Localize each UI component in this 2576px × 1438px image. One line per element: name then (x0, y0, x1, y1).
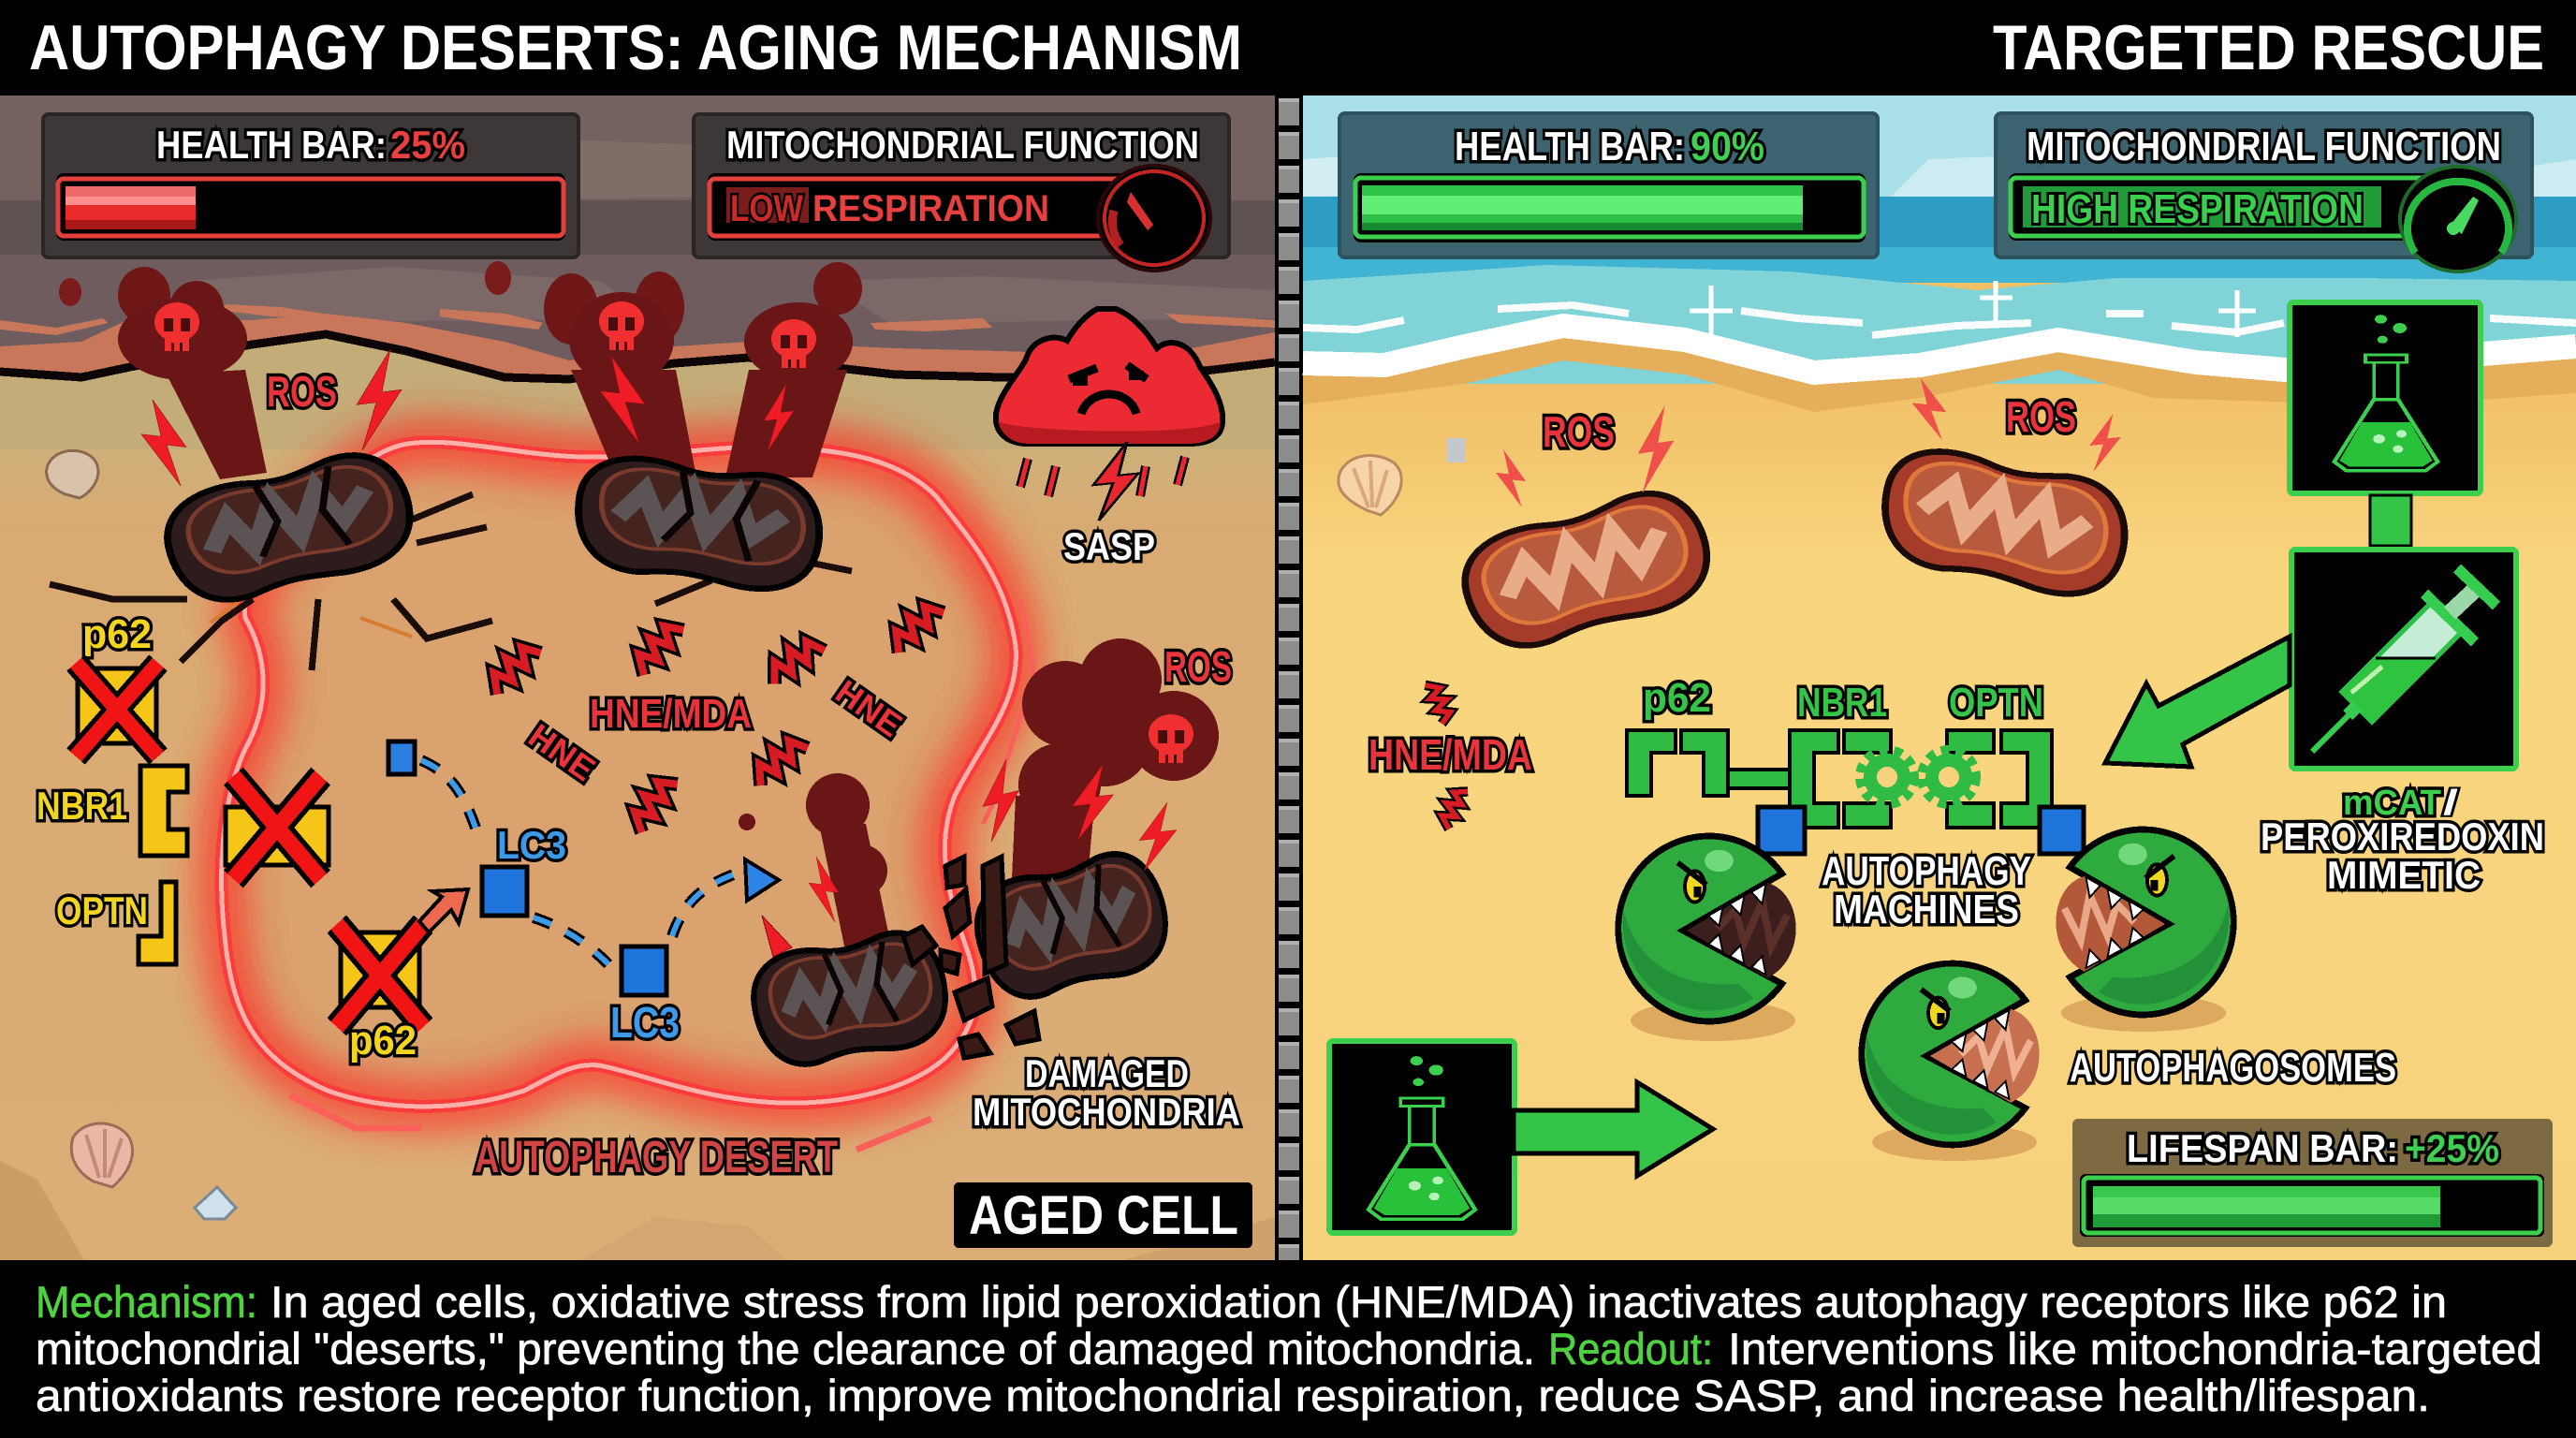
p62 crossed lower (337, 889, 468, 1064)
caption: mechanism and readout (36, 1277, 2542, 1420)
label: damaged mitochondria: MITOCHONDRIA (973, 1090, 1240, 1134)
healthy mitochondria (1454, 433, 2137, 658)
hud: health bar: HEALTH BAR: (156, 123, 387, 167)
label: SASP: SASP (1063, 524, 1155, 568)
hud: mitochondrial function (694, 114, 1229, 271)
filmstrip divider (1275, 95, 1303, 1260)
panel: targeted rescue (1303, 95, 2576, 1260)
label: ROS rescue two: ROS (2006, 392, 2076, 441)
caption: mechanism and readout: Interventions like mitochondria-targeted (1728, 1324, 2542, 1373)
label: damaged mitochondria (973, 1051, 1240, 1134)
label: autophagy desert: AUTOPHAGY DESERT (475, 1133, 838, 1182)
label: autophagy machines (1822, 848, 2031, 932)
hud: mitochondrial function rescued (1996, 113, 2532, 271)
label: autophagy machines: MACHINES (1834, 887, 2019, 932)
damaged mitochondria lower (747, 845, 1176, 1070)
smoke plumes with skulls (59, 261, 1219, 960)
caption: mechanism and readout: mitochondrial "deserts," preventing the clearance of damaged mitochondria. (36, 1324, 1535, 1373)
receptor: OPTN: OPTN (56, 888, 148, 932)
label: autophagosomes: AUTOPHAGOSOMES (2070, 1045, 2396, 1091)
shells (47, 450, 236, 1219)
bolts of ROS (141, 349, 1177, 957)
hud: mitochondrial function: RESPIRATION (812, 188, 1049, 229)
receptors: p62 crossed: p62 (82, 611, 152, 657)
ROS bolts faint (1496, 378, 2121, 507)
skull icons (154, 301, 1193, 763)
residual HNE/MDA: HNE/MDA (1368, 730, 1532, 779)
damaged mitochondria top (157, 444, 828, 610)
lipid peroxidation squiggles (483, 598, 946, 832)
hud: health bar (43, 114, 578, 257)
icon: high gauge (2400, 167, 2516, 271)
caption: mechanism and readout: In aged cells, oxidative stress from lipid peroxidation (HNE/MDA) inactivates autophagy receptors like p62 in (271, 1277, 2447, 1327)
label: mCAT peroxiredoxin mimetic: / (2443, 784, 2459, 823)
icon: SASP cloud (996, 309, 1222, 521)
left background: desert shore (0, 95, 1275, 1260)
caption: mechanism and readout: Mechanism: (36, 1277, 257, 1327)
icon box: syringe (2291, 550, 2516, 769)
caption: mechanism and readout: antioxidants restore receptor function, improve mitochondrial respiration, reduce SASP, and increase health/lifespan. (36, 1371, 2430, 1420)
pac-man autophagosome left (1618, 836, 1796, 1041)
receptor machine (1627, 675, 2084, 854)
hud: health bar rescued: 90% (1690, 124, 1764, 169)
label: ROS: ROS (267, 367, 337, 416)
autophagy desert zone (222, 442, 1034, 1150)
hud: mitochondrial function rescued: HIGH RESPIRATION (2031, 186, 2364, 232)
label: HNE/MDA: HNE/MDA (590, 691, 752, 737)
label: ROS rescue one: ROS (1543, 407, 1615, 456)
receptor machine: p62 (1643, 675, 1711, 721)
LC3 path: LC3 (497, 823, 566, 867)
p62 crossed lower: p62 (349, 1018, 417, 1064)
caption: mechanism and readout: Readout: (1548, 1324, 1713, 1373)
label: autophagy machines: AUTOPHAGY (1822, 848, 2031, 894)
badge: aged cell: AGED CELL (969, 1185, 1238, 1246)
title: aging mechanism: AUTOPHAGY DESERTS: AGING MECHANISM (29, 12, 1242, 83)
ground cracks (50, 494, 852, 670)
hud: lifespan bar: +25% (2405, 1126, 2499, 1170)
hud: health bar: 25% (390, 123, 465, 167)
hud: lifespan bar (2072, 1119, 2553, 1247)
label: ROS right: ROS (1164, 642, 1232, 691)
hud: lifespan bar: LIFESPAN BAR: (2127, 1126, 2398, 1170)
shells right (1339, 438, 1466, 515)
hud: mitochondrial function: LOW (730, 188, 803, 229)
label: damaged mitochondria: DAMAGED (1025, 1051, 1189, 1095)
connector flask to syringe (2370, 495, 2411, 546)
panel: aged cell (0, 95, 1275, 1260)
hud: mitochondrial function: MITOCHONDRIAL FUNCTION (726, 123, 1199, 167)
label: HNE angled lower: HNE (521, 716, 602, 788)
label: mCAT peroxiredoxin mimetic (2261, 784, 2544, 897)
pac-man autophagosome center (1862, 963, 2040, 1161)
icon: low gauge (1098, 166, 1210, 271)
receptor: NBR1: NBR1 (37, 784, 127, 828)
receptor machine: OPTN (1949, 680, 2043, 726)
receptors: p62 crossed (76, 611, 158, 756)
pac-man autophagosome right (2056, 829, 2233, 1032)
right background: beach (1303, 95, 2576, 1260)
crossed receptor middle (226, 776, 329, 879)
residual HNE/MDA (1368, 680, 1532, 829)
LC3 path (388, 741, 779, 1047)
hud: health bar rescued: HEALTH BAR: (1455, 124, 1685, 169)
receptor: OPTN (56, 882, 176, 964)
arrow: flask to lifespan (1514, 1082, 1713, 1176)
icon box: flask top (2290, 302, 2481, 493)
hud: health bar rescued (1339, 113, 1878, 257)
label: mCAT peroxiredoxin mimetic: MIMETIC (2327, 853, 2481, 897)
receptor machine: NBR1 (1797, 680, 1887, 726)
label: HNE angled: HNE (828, 672, 909, 744)
LC3 path: LC3 (610, 998, 680, 1047)
label: mCAT peroxiredoxin mimetic: mCAT (2343, 784, 2441, 823)
icon box: flask lower (1329, 1041, 1515, 1233)
arrow: syringe to receptors (2105, 637, 2290, 767)
receptor: NBR1 (37, 766, 187, 856)
